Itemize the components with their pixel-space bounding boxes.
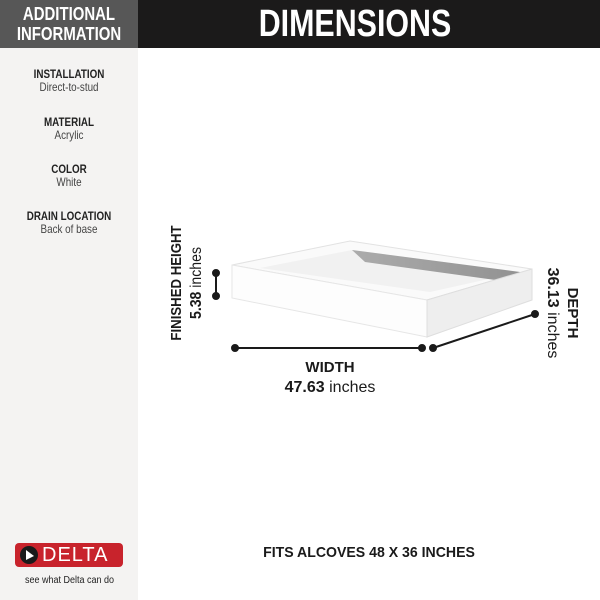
label: depth (544, 268, 581, 358)
sidebar panel (0, 48, 138, 600)
logo: delta (15, 543, 123, 586)
label: finished height: 5.38 inches (188, 247, 205, 319)
spec: installation: Direct-to-stud (39, 80, 99, 94)
header: dimensions title (138, 0, 600, 48)
label: depth: DEPTH (564, 288, 581, 338)
spec: material (44, 115, 94, 142)
spec: material: MATERIAL (44, 115, 94, 129)
spec: drain location (27, 209, 111, 236)
header: additional information (0, 0, 138, 48)
label: width: WIDTH (305, 359, 355, 376)
icon: delta emblem (20, 546, 38, 564)
dimension lines (213, 270, 538, 351)
label: finished height: FINISHED HEIGHT (168, 225, 185, 341)
label: finished height (168, 225, 205, 341)
logo: delta: DELTA (42, 544, 108, 566)
spec: color: White (56, 175, 82, 189)
label: width: 47.63 inches (285, 379, 375, 396)
spec: color (51, 162, 87, 189)
spec: drain location: Back of base (41, 222, 97, 236)
logo: delta: see what Delta can do (25, 575, 114, 586)
header: additional information: INFORMATION (17, 24, 121, 44)
spec: color: COLOR (51, 162, 87, 176)
header: dimensions title: DIMENSIONS (259, 3, 451, 45)
header: additional information: ADDITIONAL (23, 4, 115, 24)
spec: drain location: DRAIN LOCATION (27, 209, 111, 223)
spec: installation (34, 67, 104, 94)
label: depth: 36.13 inches (544, 268, 561, 358)
spec: material: Acrylic (55, 128, 83, 142)
label: width (284, 359, 375, 396)
spec: installation: INSTALLATION (34, 67, 104, 81)
note: fits alcoves: FITS ALCOVES 48 X 36 INCHES (263, 544, 475, 561)
